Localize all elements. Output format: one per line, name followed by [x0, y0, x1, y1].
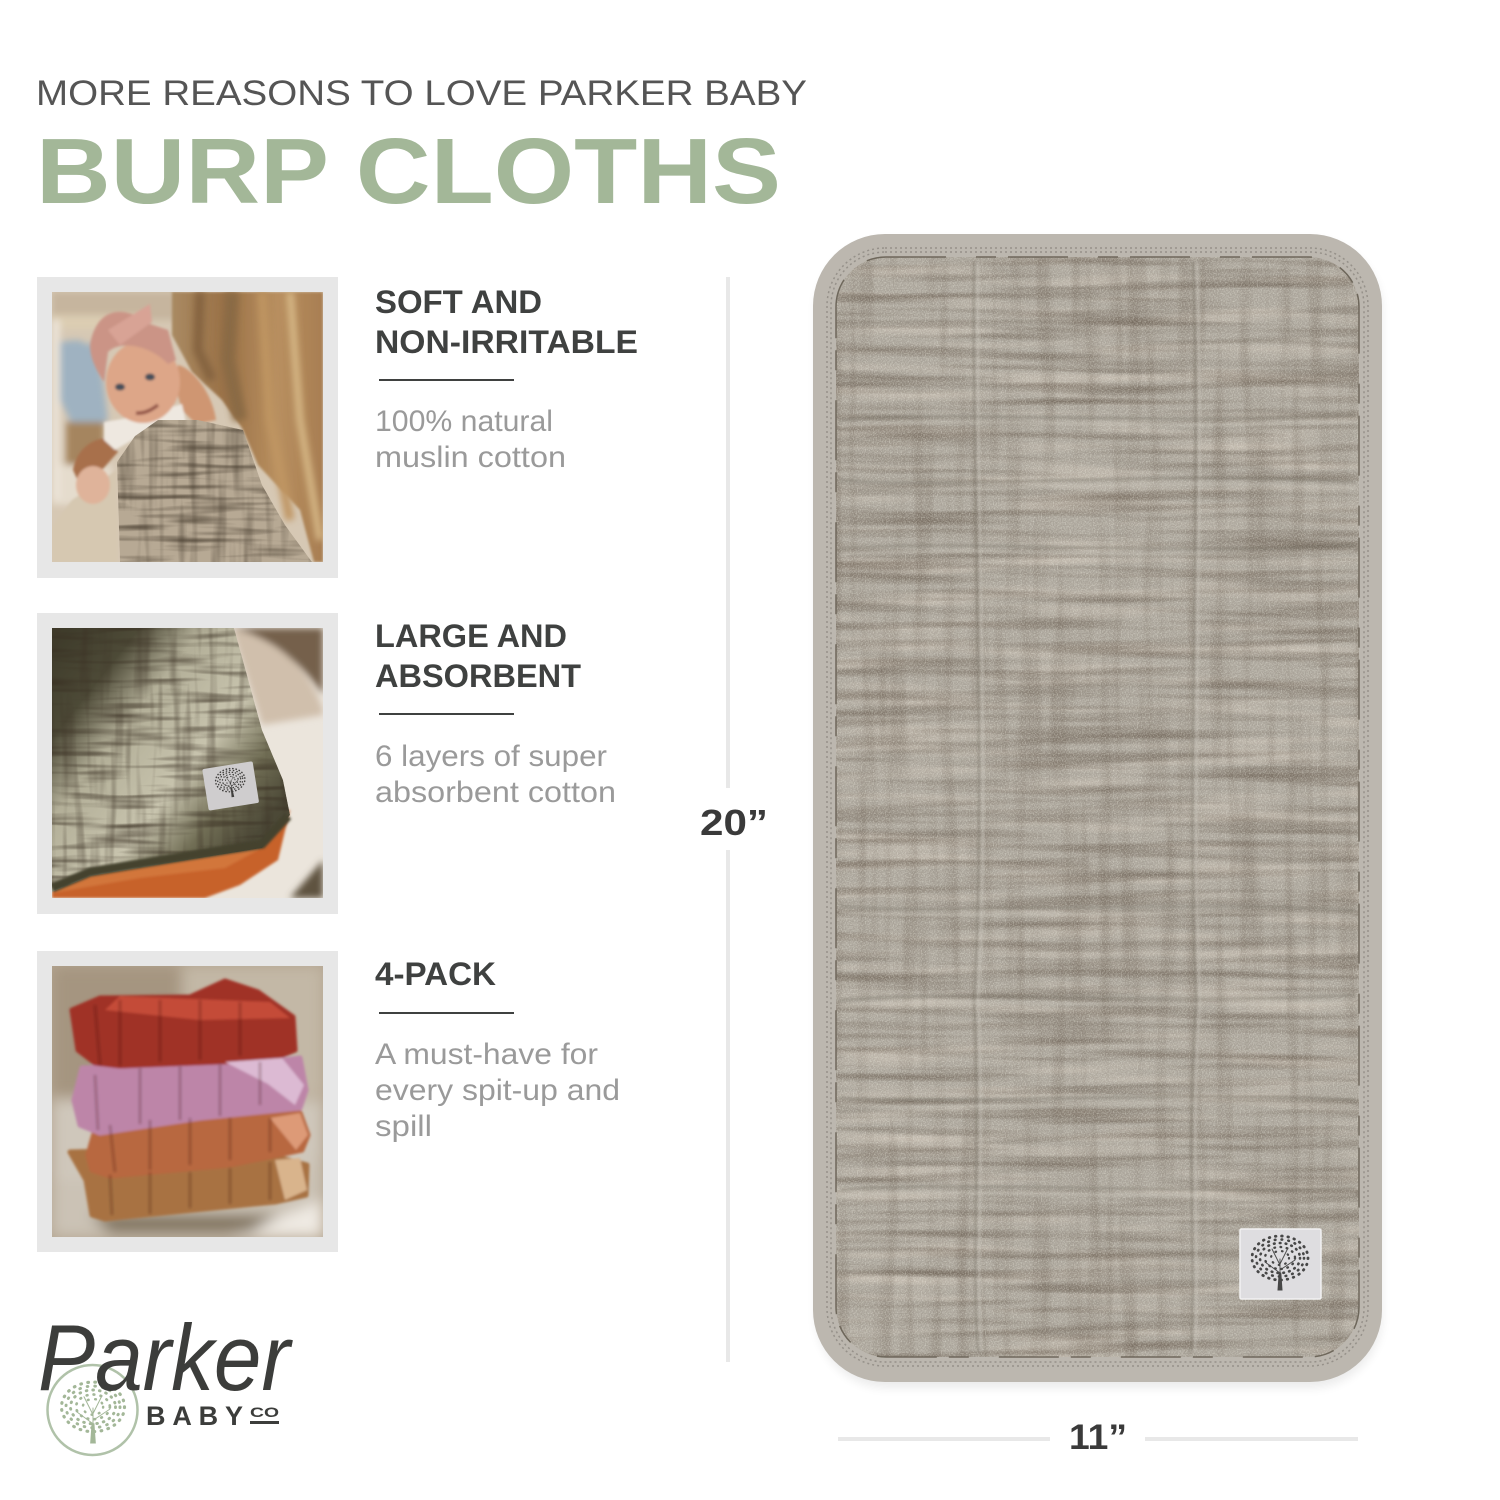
heading: soft and non-irritable: SOFT AND [375, 284, 542, 320]
icon: sewn cloth label [202, 761, 259, 811]
logo: Parker Baby Co [38, 1305, 293, 1455]
logo wordmark: Parker: Parker [38, 1305, 293, 1410]
panel: 4-pack [37, 951, 620, 1252]
photo frame: folded cloth [37, 613, 338, 914]
photo: olive muslin cloth on plate [52, 628, 323, 898]
logo wordmark: Co: CO [250, 1404, 279, 1420]
photo frame: mother and baby [37, 277, 338, 578]
heading: large and absorbent: ABSORBENT [375, 658, 581, 694]
description: must-have: spill [375, 1110, 432, 1143]
eyebrow heading: MORE REASONS TO LOVE PARKER BABY [36, 74, 807, 113]
product: muslin burp cloth [813, 234, 1382, 1388]
heading: 4-pack: 4-PACK [375, 956, 496, 992]
height dimension: 20 inches [700, 277, 768, 1362]
icon: sewn tree label [1240, 1229, 1321, 1299]
heading: large and absorbent: LARGE AND [375, 618, 567, 654]
width dimension: 11 inches: 11” [1069, 1418, 1127, 1457]
panel: large and absorbent [37, 613, 616, 914]
panel: soft and non-irritable [37, 277, 638, 578]
logo emblem: circle with tree [48, 1365, 138, 1455]
photo: mother holding baby over muslin cloth [52, 292, 323, 562]
description: muslin cotton: 100% natural [375, 405, 553, 438]
photo frame: stacked cloths [37, 951, 338, 1252]
photo: stack of four coloured cloths [52, 966, 323, 1237]
cloth body texture [836, 257, 1359, 1357]
main title: BURP CLOTHS [36, 119, 781, 223]
description: must-have: A must-have for [375, 1038, 598, 1071]
logo wordmark: Baby: BABY [146, 1401, 243, 1431]
height dimension: 20 inches: 20” [700, 802, 768, 843]
description: six layers: absorbent cotton [375, 776, 616, 809]
width dimension: 11 inches [838, 1418, 1358, 1457]
description: must-have: every spit-up and [375, 1074, 620, 1107]
cloth binding edge [813, 234, 1382, 1382]
description: six layers: 6 layers of super [375, 740, 607, 773]
heading: soft and non-irritable: NON-IRRITABLE [375, 324, 638, 360]
seams and wrinkles [840, 262, 1355, 1352]
description: muslin cotton: muslin cotton [375, 441, 566, 474]
